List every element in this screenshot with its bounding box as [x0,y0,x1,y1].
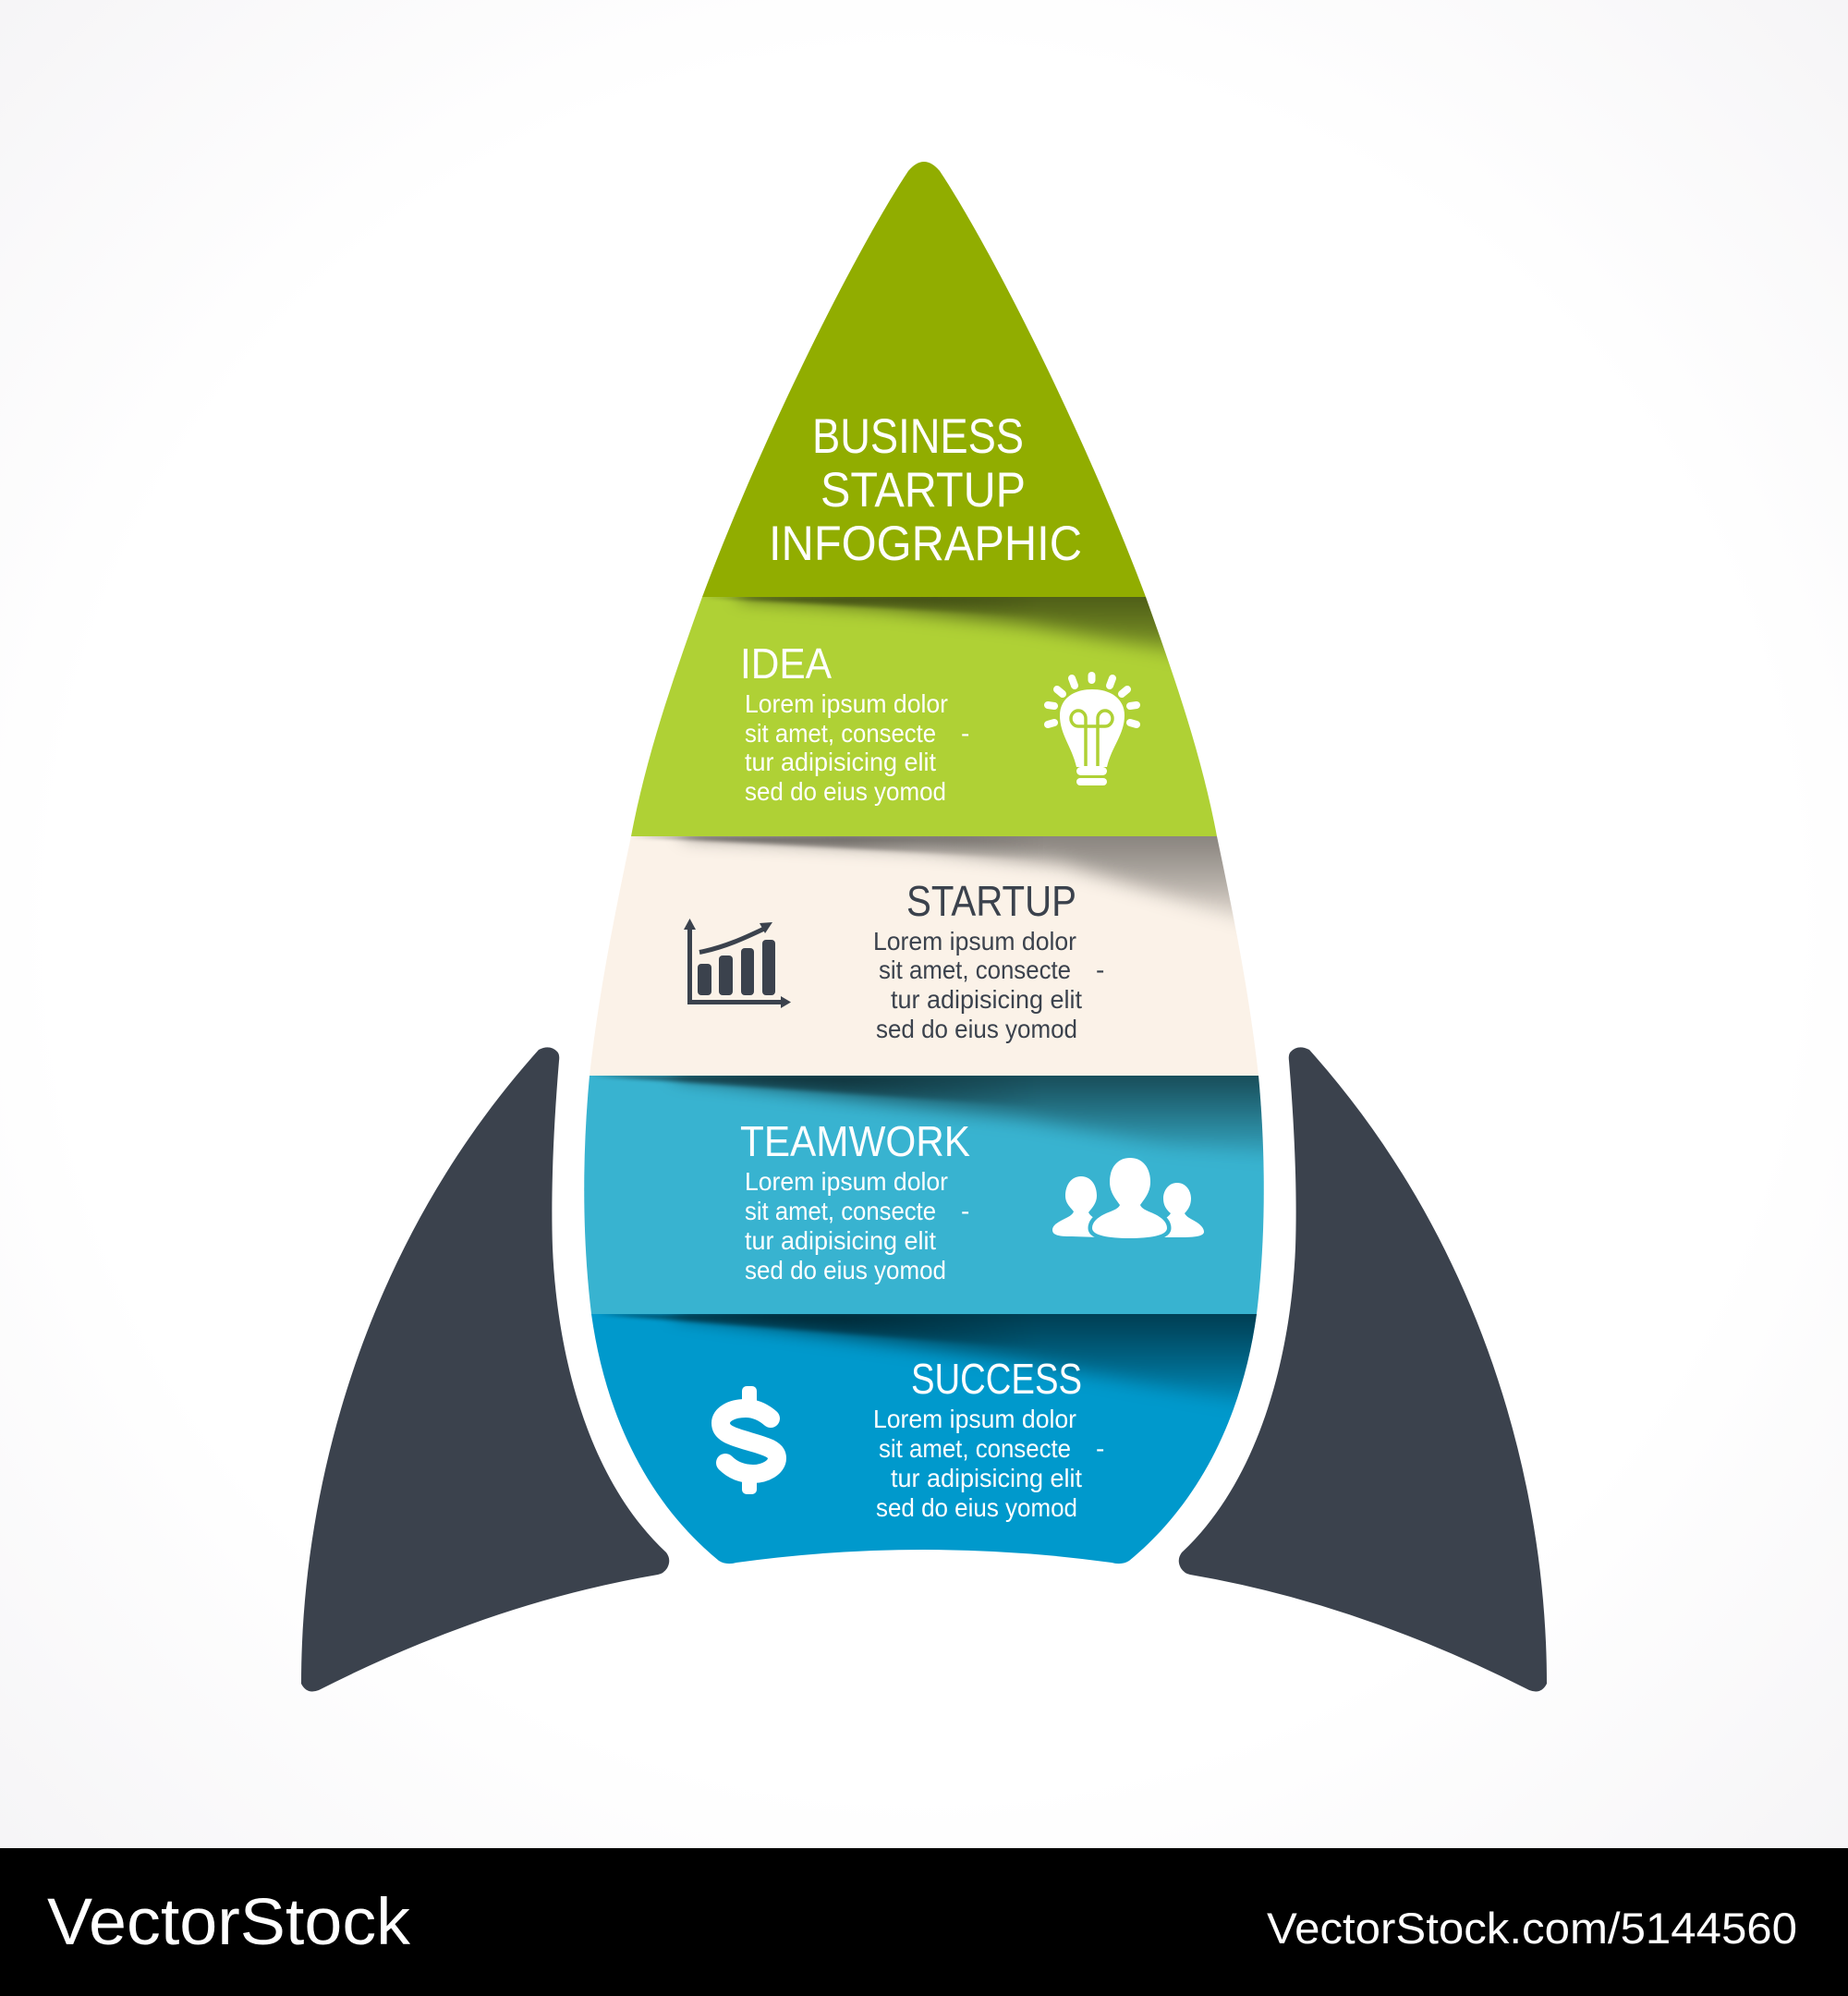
idea text: tur adipisicing elit [745,748,936,776]
panel: startup [590,813,1266,1076]
idea text [745,689,969,806]
teamwork text [745,1167,969,1284]
startup band [590,836,1258,1076]
teamwork text: - [961,1197,969,1225]
panel: success [591,1314,1257,1564]
right rocket fin [1179,1047,1547,1691]
startup text: tur adipisicing elit [891,985,1082,1014]
left rocket fin [301,1047,669,1691]
success text [873,1405,1104,1522]
idea fold shadow [711,597,1168,660]
success text: sit amet, consecte [879,1434,1071,1463]
teamwork text: Lorem ipsum dolor [745,1167,948,1196]
title: STARTUP [821,463,1026,517]
panel: idea [631,573,1217,836]
title [769,409,1082,571]
idea text: sit amet, consecte [745,719,936,748]
icon: dollar sign [721,1386,777,1494]
footer band [0,1848,1848,1996]
footer url text: VectorStock.com/5144560 [1267,1904,1797,1953]
teamwork heading: TEAMWORK [740,1117,970,1165]
success band [591,1314,1257,1564]
teamwork text: tur adipisicing elit [745,1226,936,1255]
nose cone shape [702,162,1146,597]
icon: team of three people [1052,1158,1204,1238]
success fold shadow [602,1314,1257,1406]
success text: tur adipisicing elit [891,1464,1082,1492]
startup text: sit amet, consecte [879,955,1071,984]
teamwork text: sed do eius yomod [745,1256,946,1284]
success text: Lorem ipsum dolor [873,1405,1076,1433]
idea text: Lorem ipsum dolor [745,689,948,718]
startup text [873,927,1104,1043]
teamwork fold shadow [597,1076,1263,1158]
icon: light bulb [1048,675,1137,785]
teamwork band [584,1076,1264,1314]
startup text: - [1096,955,1104,984]
idea band [631,597,1217,836]
idea text: - [961,719,969,748]
icon: growth chart [684,919,791,1008]
panel: nose cone title [702,162,1146,597]
panel: teamwork [584,1076,1264,1314]
success heading: SUCCESS [911,1355,1082,1403]
title: BUSINESS [812,409,1024,464]
startup heading: STARTUP [906,877,1076,925]
startup text: sed do eius yomod [876,1015,1077,1043]
success text: - [1096,1434,1104,1463]
idea heading: IDEA [740,639,832,688]
footer logo text: VectorStock [47,1886,411,1959]
idea text: sed do eius yomod [745,777,946,806]
title: INFOGRAPHIC [769,517,1082,571]
startup fold shadow [638,836,1234,923]
success text: sed do eius yomod [876,1493,1077,1522]
startup text: Lorem ipsum dolor [873,927,1076,955]
teamwork text: sit amet, consecte [745,1197,936,1225]
